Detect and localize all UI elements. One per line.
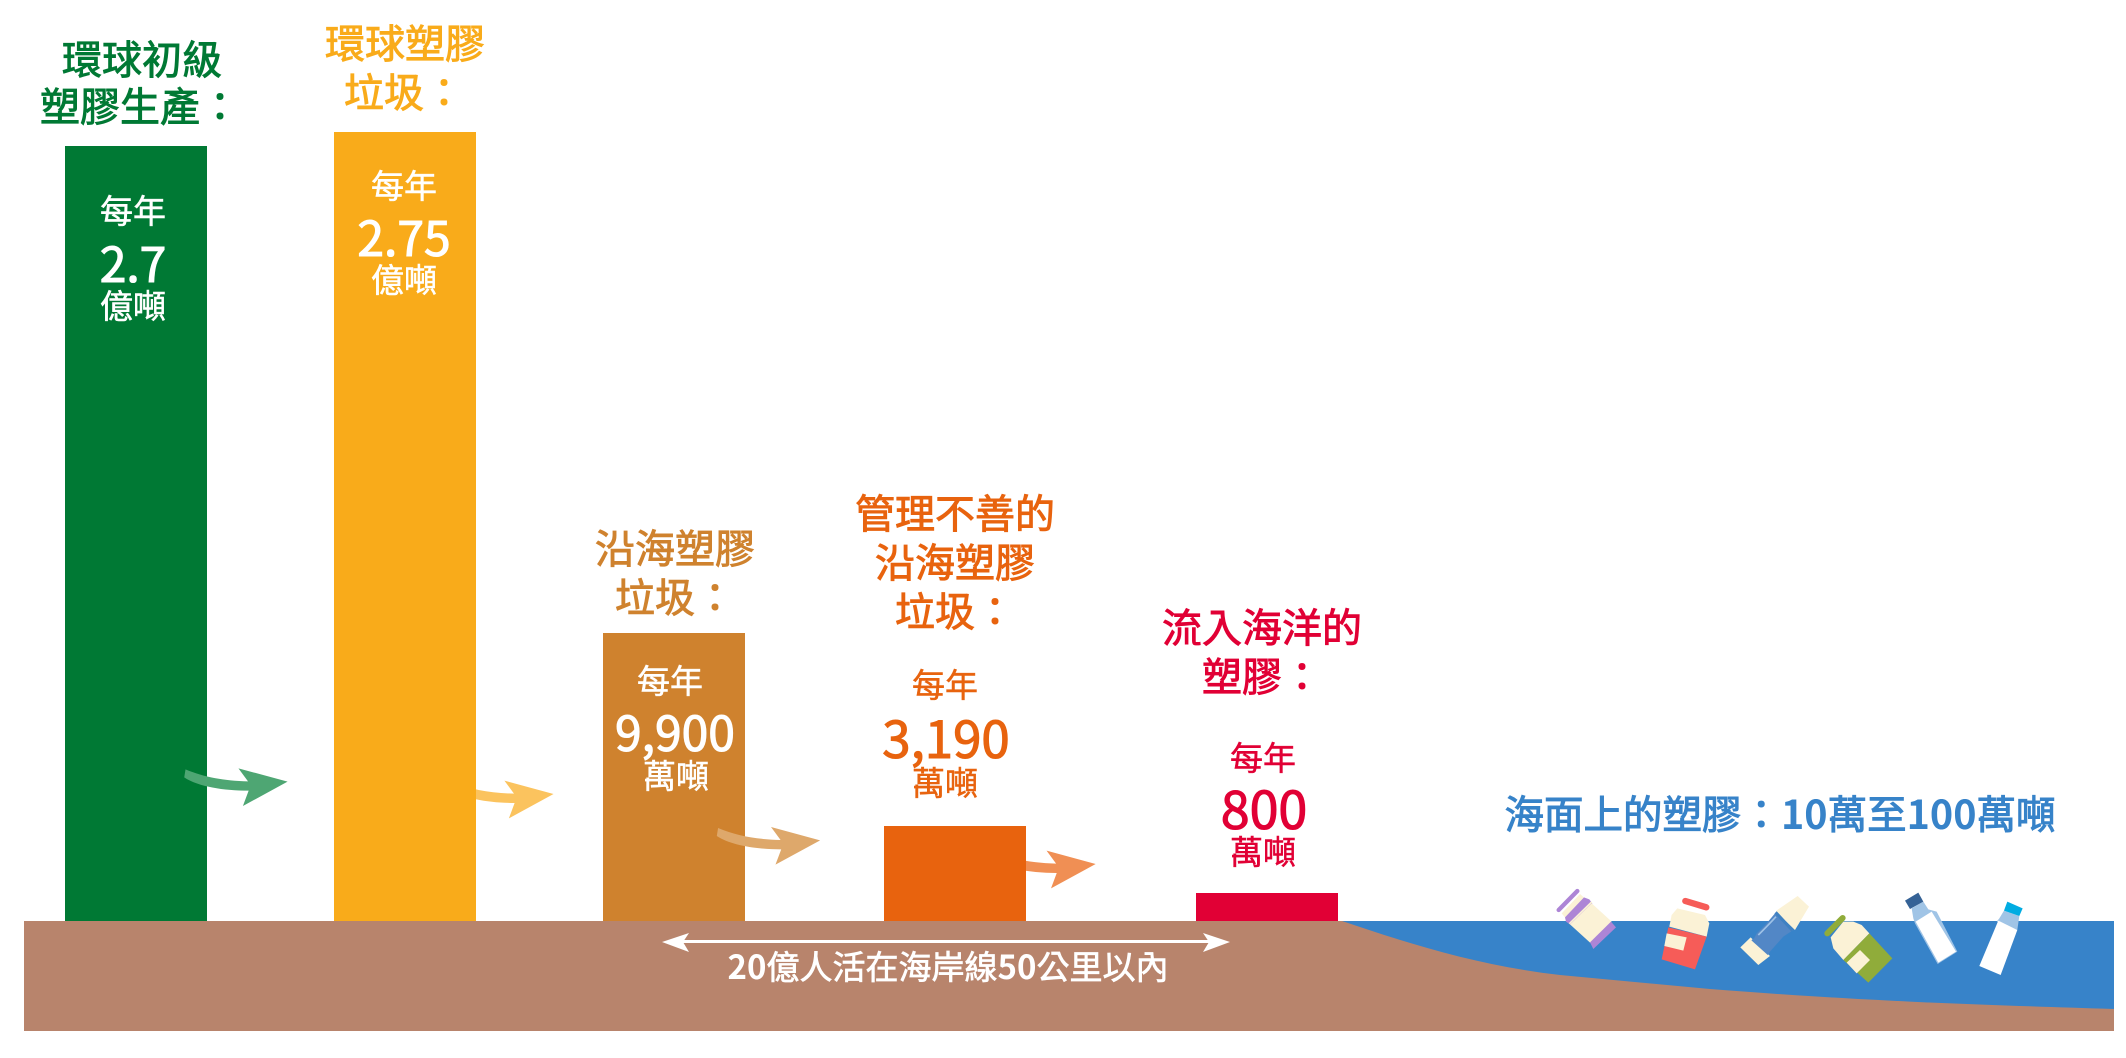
sea — [1342, 921, 2114, 1009]
arrow: mismanaged to ocean (behind bar) — [992, 851, 1096, 888]
arrow: double-headed coast span — [662, 933, 1230, 952]
bar: coastal plastic waste: 萬噸 — [643, 750, 709, 798]
bar: coastal plastic waste: 每年 — [637, 655, 703, 703]
bar: global plastic waste: 每年 — [371, 160, 437, 208]
label: plastic on the sea surface: 海面上的塑膠：10萬至100萬噸 — [1504, 784, 2056, 841]
figures: plastic entering the ocean: 每年 — [1230, 732, 1296, 780]
arrow: coastal to mismanaged — [717, 827, 820, 865]
icon: squeezed tube — [1740, 896, 1809, 965]
ground and seabed — [24, 921, 2114, 1031]
heading: plastic entering the ocean: 塑膠： — [1202, 645, 1322, 703]
heading: mismanaged coastal plastic waste — [855, 482, 1055, 638]
figures: mismanaged coastal plastic waste: 3,190 — [882, 699, 1010, 773]
bar: coastal plastic waste: 9,900 — [615, 695, 735, 765]
heading: coastal plastic waste: 沿海塑膠 — [595, 517, 755, 575]
icon: water bottle dark cap — [1905, 893, 1957, 964]
bar: global primary plastic production — [65, 146, 207, 921]
bar: global plastic waste: 2.75 — [357, 200, 451, 270]
icon: green bottle — [1827, 918, 1892, 983]
heading: global primary plastic production: 塑膠生產： — [40, 75, 240, 133]
heading: mismanaged coastal plastic waste: 管理不善的 — [855, 482, 1055, 540]
heading: coastal plastic waste: 垃圾： — [615, 566, 735, 624]
bar: global primary plastic production: 每年 — [100, 185, 166, 233]
bar: plastic entering the ocean — [1196, 893, 1338, 921]
heading: global plastic waste — [325, 12, 485, 119]
bar: mismanaged coastal plastic waste — [884, 826, 1026, 921]
heading: mismanaged coastal plastic waste: 沿海塑膠 — [875, 531, 1035, 589]
figures: mismanaged coastal plastic waste: 萬噸 — [912, 757, 978, 805]
floating plastic items, left group — [1559, 891, 1809, 969]
bar: global plastic waste: 億噸 — [371, 254, 437, 302]
heading: mismanaged coastal plastic waste: 垃圾： — [895, 580, 1015, 638]
icon: red bottle — [1662, 901, 1709, 969]
heading: plastic entering the ocean: 流入海洋的 — [1162, 596, 1362, 654]
figures: mismanaged coastal plastic waste — [882, 659, 1010, 805]
heading: global plastic waste: 環球塑膠 — [325, 12, 485, 70]
heading: global primary plastic production: 環球初級 — [62, 28, 222, 86]
arrow: orange to coastal (behind bar) — [450, 781, 554, 818]
heading: global plastic waste: 垃圾： — [344, 61, 464, 119]
bar: global plastic waste — [334, 132, 476, 921]
figures: plastic entering the ocean: 800 — [1221, 769, 1307, 844]
arrow: production to waste — [184, 768, 288, 806]
label: population near coast: 20億人活在海岸線50公里以內 — [728, 941, 1168, 989]
floating plastic items, right group — [1827, 893, 2023, 983]
heading: plastic entering the ocean — [1162, 596, 1362, 703]
heading: global primary plastic production — [40, 28, 240, 133]
figures: mismanaged coastal plastic waste: 每年 — [912, 659, 978, 707]
bar: coastal plastic waste — [603, 633, 745, 921]
figures: plastic entering the ocean — [1221, 732, 1307, 874]
heading: coastal plastic waste — [595, 517, 755, 624]
icon: water bottle cyan cap — [1979, 902, 2023, 975]
icon: purple jar — [1559, 891, 1616, 949]
figures: plastic entering the ocean: 萬噸 — [1230, 826, 1296, 874]
bar: global primary plastic production: 2.7 — [100, 226, 166, 296]
bar: global primary plastic production: 億噸 — [100, 280, 166, 328]
